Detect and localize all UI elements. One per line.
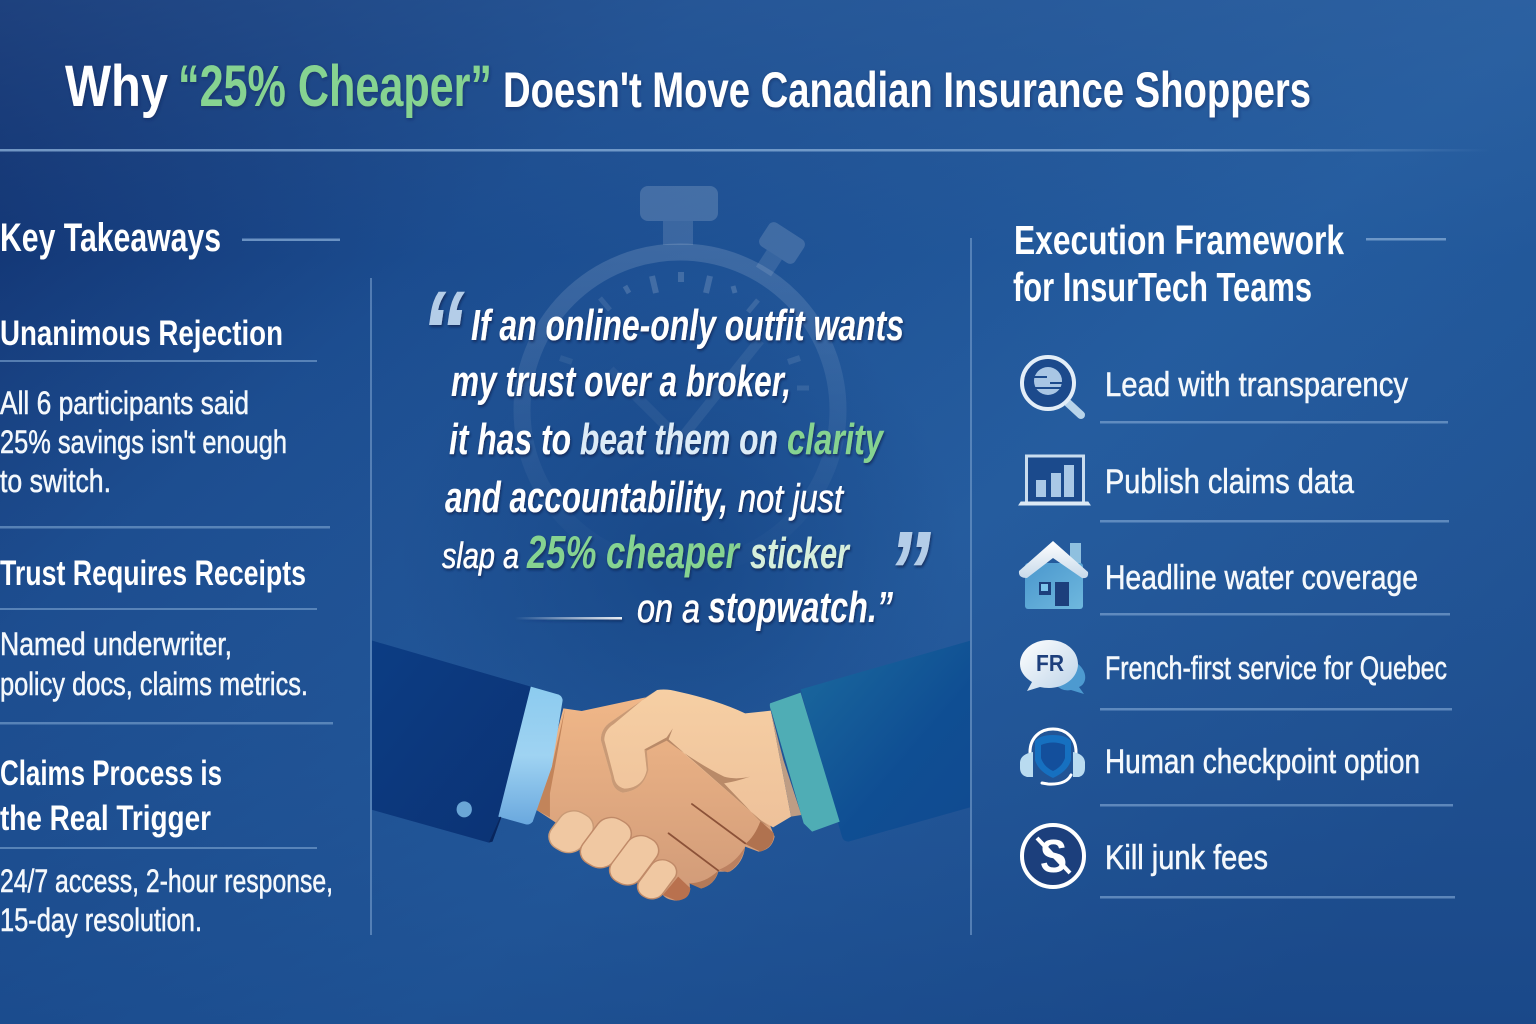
- quote text: slap a: [442, 535, 519, 576]
- right sleeve: [801, 639, 975, 842]
- quote text: and accountability,: [445, 473, 728, 522]
- quote text: stopwatch.”: [708, 583, 893, 632]
- right cuff: [770, 693, 840, 832]
- icon: FR speech bubbles: FR: [1036, 650, 1064, 676]
- icon: FR speech bubbles: [1020, 640, 1085, 694]
- takeaway: claims process: Claims Process is: [0, 754, 222, 793]
- takeaway: trust requires receipts: [0, 554, 317, 702]
- quote text: sticker: [750, 529, 851, 578]
- quote text: on a: [637, 587, 700, 631]
- quote text: it has to beat them on: [449, 415, 778, 464]
- takeaway: claims process: the Real Trigger: [0, 799, 211, 838]
- item: lead with transparency: Lead with transparency: [1105, 366, 1408, 404]
- handshake illustration: [370, 639, 975, 903]
- item: lead with transparency: [1022, 357, 1448, 424]
- takeaway: unanimous rejection: All 6 participants said: [0, 385, 249, 421]
- icon: bar chart screen: [1019, 456, 1090, 505]
- icon: house: [1019, 541, 1088, 609]
- takeaway: trust requires receipts: Trust Requires Receipts: [0, 554, 306, 593]
- quote text: If an online-only outfit wants: [471, 301, 904, 350]
- quote text: 25% cheaper: [526, 526, 741, 578]
- title: Why: [65, 54, 168, 119]
- takeaway: unanimous rejection: 25% savings isn't enough: [0, 424, 287, 460]
- item: headline water coverage: Headline water coverage: [1105, 559, 1418, 597]
- sleeve button: [457, 801, 472, 817]
- item: human checkpoint: Human checkpoint option: [1105, 743, 1420, 781]
- takeaway: trust requires receipts: Named underwriter,: [0, 626, 232, 662]
- item: publish claims data: [1019, 456, 1449, 522]
- left sleeve: [370, 640, 531, 843]
- heading: execution framework: Execution Framework: [1014, 217, 1344, 263]
- takeaway: claims process: [0, 754, 333, 938]
- left hand: [537, 697, 775, 901]
- takeaway: unanimous rejection: to switch.: [0, 463, 111, 499]
- right hand: [601, 689, 791, 827]
- heading: key takeaways: Key Takeaways: [0, 216, 221, 260]
- takeaway: claims process: 24/7 access, 2-hour response,: [0, 863, 333, 899]
- icon: magnifying glass: [1022, 357, 1081, 415]
- takeaway: unanimous rejection: [0, 314, 317, 499]
- item: kill junk fees: Kill junk fees: [1105, 839, 1268, 877]
- icon: no dollar sign: S: [1040, 830, 1067, 882]
- background stopwatch: [522, 186, 838, 568]
- quote text: clarity: [787, 415, 885, 464]
- heading: execution framework: [1013, 217, 1344, 310]
- icon: no dollar sign: [1022, 825, 1084, 887]
- title: Doesn't Move Canadian Insurance Shoppers: [503, 62, 1311, 118]
- left cuff: [498, 687, 563, 825]
- takeaway: claims process: 15-day resolution.: [0, 902, 202, 938]
- takeaway: trust requires receipts: policy docs, claims metrics.: [0, 666, 308, 702]
- closing quote mark: ”: [887, 507, 931, 639]
- item: publish claims data: Publish claims data: [1105, 463, 1354, 501]
- panel: key takeaways: [0, 216, 340, 938]
- takeaway: unanimous rejection: Unanimous Rejection: [0, 314, 283, 353]
- item: french-first service: French-first service for Quebec: [1105, 650, 1447, 686]
- item: human checkpoint: [1020, 729, 1453, 806]
- opening quote mark: “: [421, 267, 465, 399]
- title: “25% Cheaper”: [178, 54, 492, 119]
- fingers: [548, 810, 678, 900]
- quote text: [421, 267, 931, 639]
- quote text: my trust over a broker,: [451, 357, 791, 406]
- item: headline water coverage: [1019, 541, 1450, 616]
- icon: headset: [1020, 729, 1085, 784]
- item: kill junk fees: [1022, 825, 1455, 898]
- panel: execution framework: [1013, 217, 1455, 898]
- item: french-first service: [1020, 640, 1452, 710]
- finger creases: [669, 804, 745, 871]
- quote text: not just: [738, 477, 845, 521]
- heading: execution framework: for InsurTech Teams: [1013, 264, 1312, 310]
- title: [65, 54, 1311, 119]
